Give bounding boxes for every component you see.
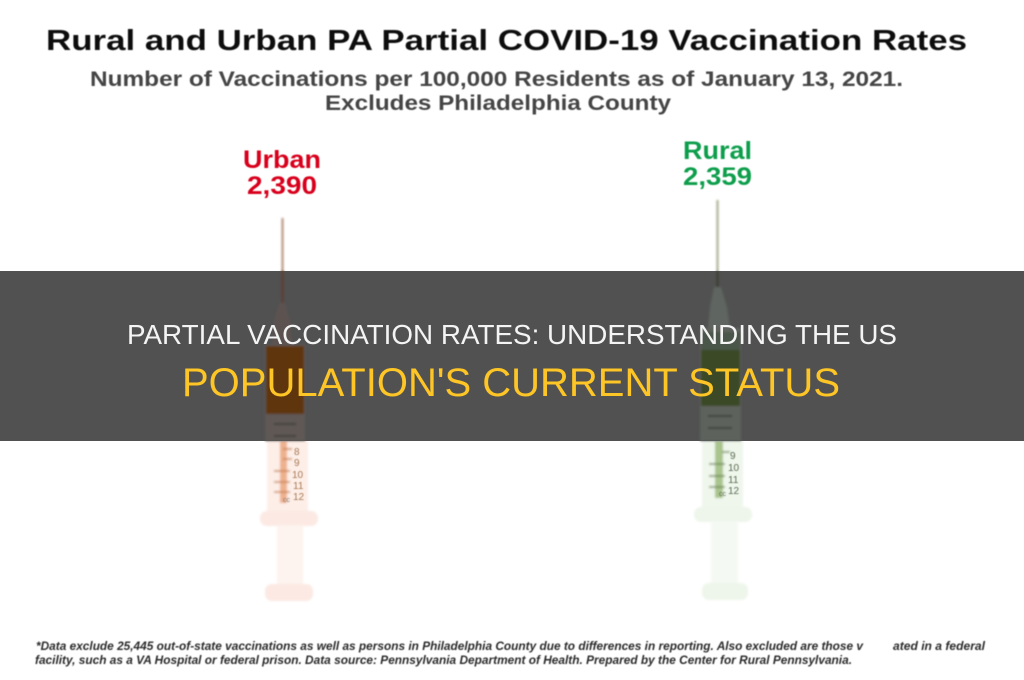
rural syringe scale numbers bbox=[719, 451, 740, 498]
footnote: ated in a federal bbox=[893, 639, 986, 653]
rural label and value bbox=[683, 137, 752, 191]
chart subtitle bbox=[90, 67, 903, 115]
urban syringe scale numbers: 11 bbox=[293, 481, 304, 492]
urban syringe, lower part bbox=[260, 218, 318, 601]
chart subtitle: Excludes Philadelphia County bbox=[325, 91, 671, 115]
urban syringe scale numbers: 9 bbox=[294, 458, 300, 469]
urban label and value: 2,390 bbox=[247, 172, 317, 200]
rural syringe scale numbers: 12 bbox=[728, 486, 740, 497]
headline line 2: POPULATION'S CURRENT STATUS bbox=[182, 361, 840, 405]
rural syringe, lower part bbox=[694, 200, 752, 600]
dark headline band bbox=[0, 271, 1024, 441]
rural syringe scale numbers: 9 bbox=[730, 451, 736, 462]
urban syringe scale numbers: 8 bbox=[294, 447, 300, 458]
urban syringe scale numbers: 12 bbox=[293, 492, 305, 503]
footnote: facility, such as a VA Hospital or federal prison. Data source: Pennsylvania Department of Health. Prepared by the Center for Rural Pennsylvania. bbox=[35, 653, 852, 667]
headline line 1: PARTIAL VACCINATION RATES: UNDERSTANDING THE US bbox=[127, 319, 897, 350]
urban syringe seen through band bbox=[265, 271, 305, 441]
rural syringe scale numbers: 11 bbox=[728, 475, 739, 486]
rural syringe scale numbers: 10 bbox=[728, 463, 740, 474]
rural syringe seen through band bbox=[700, 271, 741, 441]
urban syringe scale numbers: 10 bbox=[292, 470, 304, 481]
urban label and value bbox=[243, 146, 321, 200]
rural label and value: Rural bbox=[683, 137, 752, 165]
urban syringe scale numbers: cc bbox=[283, 497, 290, 504]
rural label and value: 2,359 bbox=[683, 163, 752, 191]
rural syringe scale numbers: cc bbox=[719, 491, 726, 498]
urban syringe scale numbers bbox=[283, 447, 305, 504]
chart subtitle: Number of Vaccinations per 100,000 Residents as of January 13, 2021. bbox=[90, 67, 903, 91]
chart title: Rural and Urban PA Partial COVID-19 Vaccination Rates bbox=[46, 25, 967, 57]
footnote bbox=[35, 639, 986, 667]
footnote: *Data exclude 25,445 out-of-state vaccinations as well as persons in Philadelphia County due to differences in reporting. Also excluded are those v bbox=[36, 639, 864, 653]
urban label and value: Urban bbox=[243, 146, 321, 174]
